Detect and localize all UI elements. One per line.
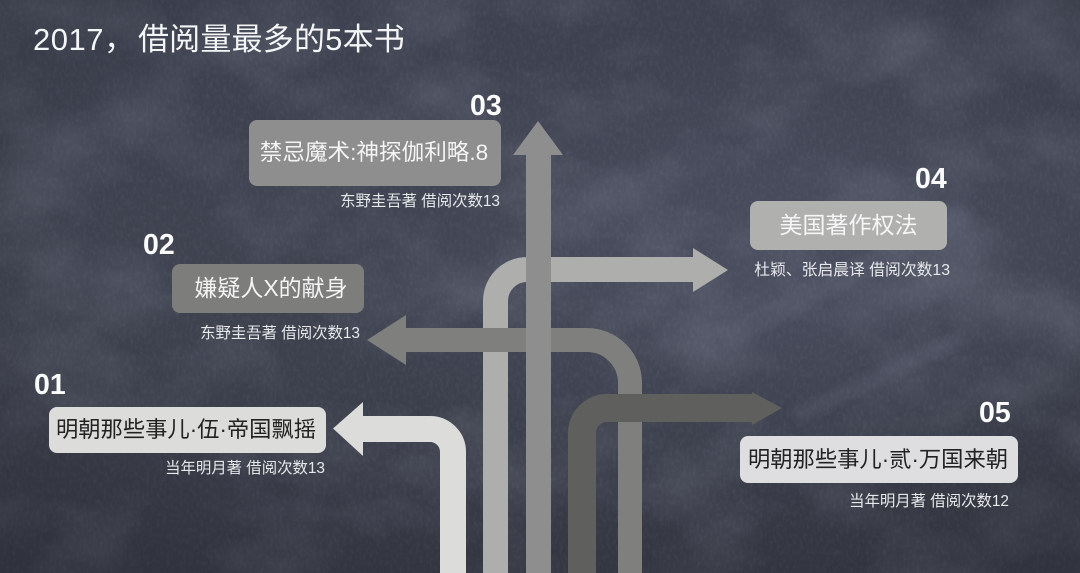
rank 05: 05 [979, 397, 1011, 429]
rank 02: 02 [143, 229, 175, 261]
caption 05: 当年明月著 借阅次数12 [849, 493, 1009, 510]
entry 02 [143, 229, 364, 342]
book title box 01: 明朝那些事儿·伍·帝国飘摇 [56, 417, 316, 442]
book title box 04 [750, 201, 947, 250]
book title box 05: 明朝那些事儿·贰·万国来朝 [748, 447, 1008, 472]
book title box 01 [49, 407, 326, 453]
arrow 02: mid grey, pointing left [367, 315, 630, 573]
entry 01 [34, 369, 326, 477]
title: 2017，借阅量最多的5本书 [33, 22, 405, 57]
arrow 04: silver, pointing right [496, 248, 728, 573]
rank 01: 01 [34, 369, 66, 401]
entry 05 [740, 397, 1018, 510]
caption 04: 杜颖、张启晨译 借阅次数13 [754, 262, 950, 279]
book title box 03: 禁忌魔术:神探伽利略.8 [260, 140, 488, 165]
entry 04 [750, 163, 950, 279]
caption 02: 东野圭吾著 借阅次数13 [200, 325, 360, 342]
book title box 03 [249, 120, 501, 186]
arrow 01: light grey, pointing left [333, 402, 453, 573]
book title box 02 [172, 264, 364, 313]
book title box 02: 嫌疑人X的献身 [194, 275, 348, 301]
caption 03: 东野圭吾著 借阅次数13 [340, 193, 500, 210]
rank 04: 04 [915, 163, 947, 195]
arrow 03: grey, pointing up [513, 121, 563, 573]
rank 03: 03 [470, 90, 502, 122]
entry 03 [249, 90, 502, 210]
arrow 05: dark grey, pointing right [582, 392, 782, 573]
book title box 05 [740, 436, 1018, 483]
book title box 04: 美国著作权法 [780, 212, 918, 238]
caption 01: 当年明月著 借阅次数13 [165, 460, 325, 477]
